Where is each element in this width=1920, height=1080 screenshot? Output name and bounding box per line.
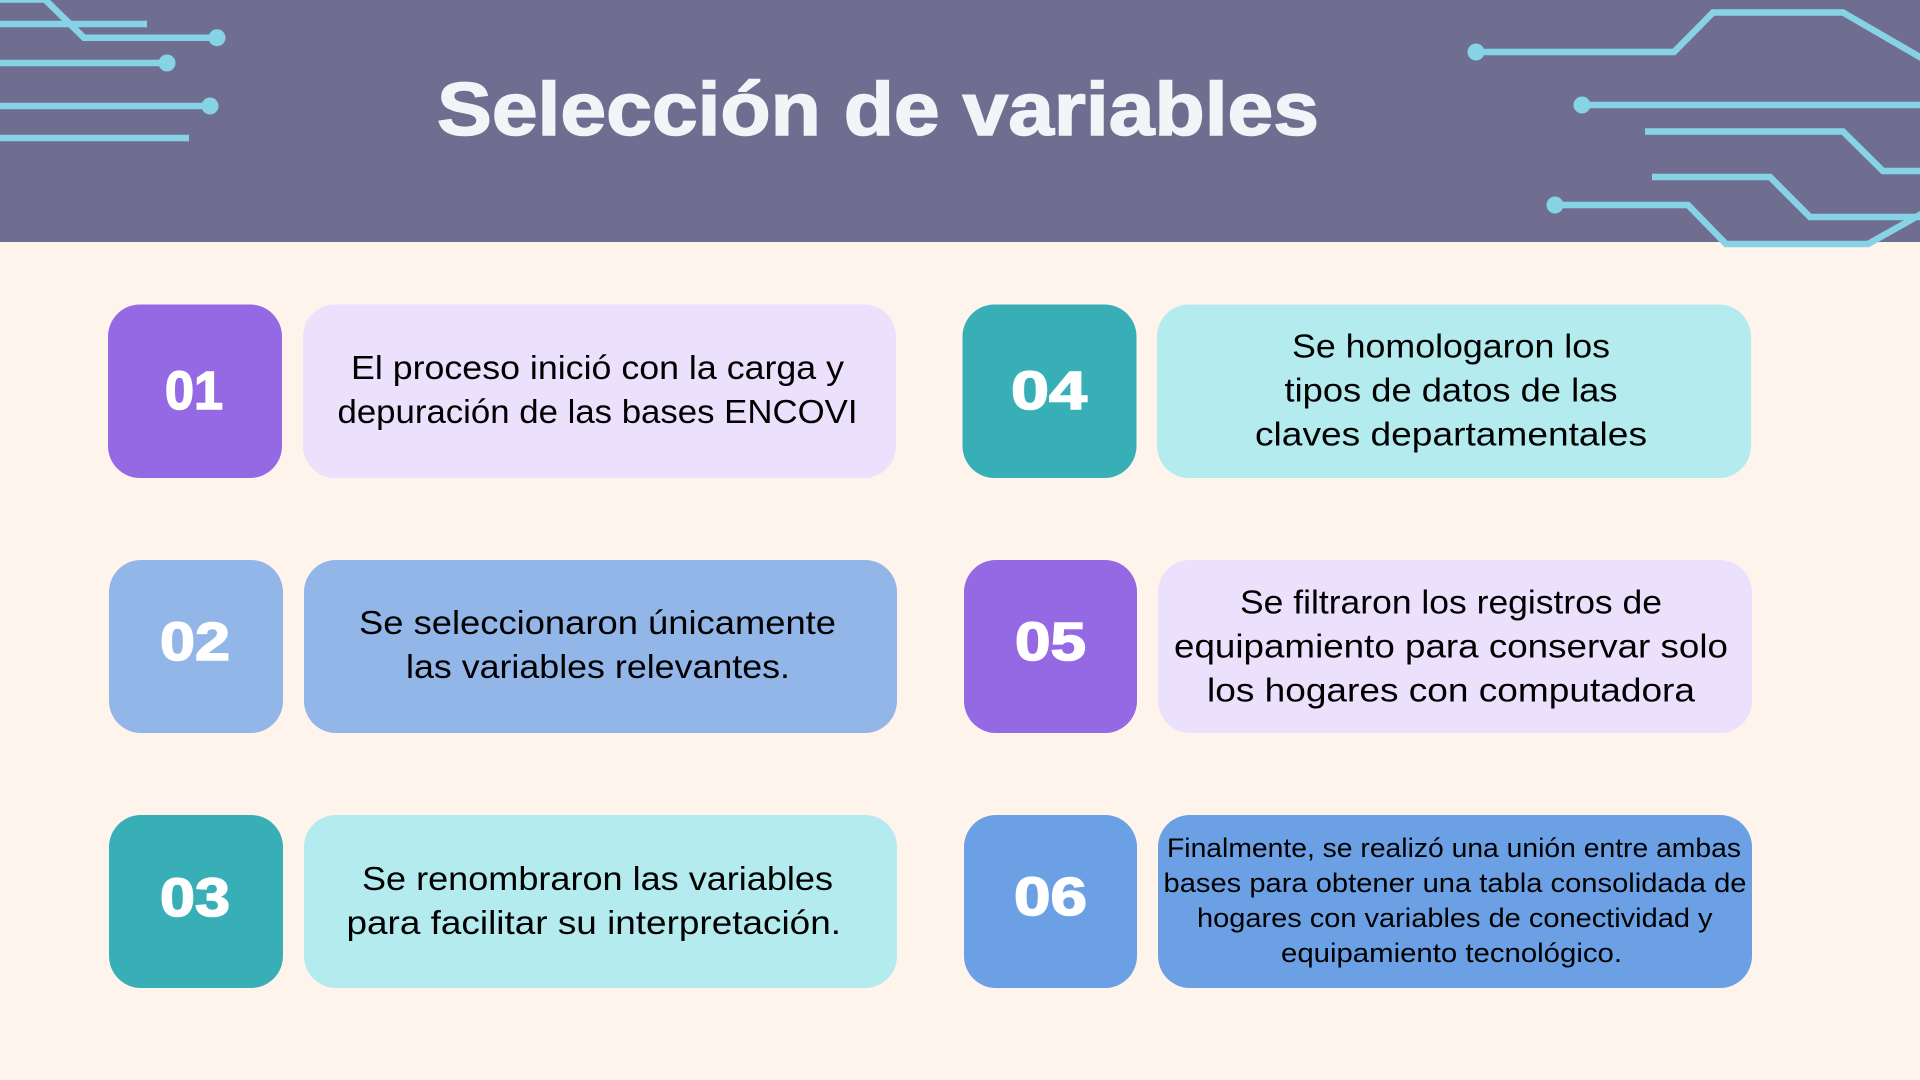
text card 06: hogares con variables de conectividad y [1197, 903, 1713, 933]
text card 05 [1158, 560, 1752, 733]
step 01 [108, 304, 896, 478]
number badge 06: 06 [1014, 867, 1087, 927]
step 05 [964, 560, 1752, 733]
number badge 01: 01 [165, 361, 223, 421]
header banner [0, 0, 1920, 242]
text card 05: equipamiento para conservar solo [1174, 628, 1728, 664]
text card 03 [304, 815, 897, 988]
text card 04 [1157, 304, 1751, 478]
text card 03: Se renombraron las variables [362, 860, 833, 897]
number badge 03: 03 [160, 868, 230, 928]
text card 06: Finalmente, se realizó una unión entre ambas [1167, 833, 1741, 863]
number badge 04: 04 [1011, 361, 1087, 421]
text card 02: Se seleccionaron únicamente [359, 604, 836, 641]
number badge 05 [964, 560, 1137, 733]
number badge 05: 05 [1015, 612, 1086, 672]
number badge 02 [109, 560, 283, 733]
circuit decoration: left [0, 0, 226, 138]
circuit decoration: right [1468, 12, 1920, 244]
text card 05: Se filtraron los registros de [1240, 584, 1662, 620]
step 03 [109, 815, 897, 988]
text card 04: tipos de datos de las [1284, 372, 1618, 408]
title: Selección de variables [437, 67, 1319, 151]
text card 02 [304, 560, 897, 733]
number badge 01 [108, 304, 282, 478]
number badge 06 [964, 815, 1137, 988]
step 06 [964, 815, 1752, 988]
text card 04: claves departamentales [1255, 416, 1647, 452]
number badge 03 [109, 815, 283, 988]
text card 02: las variables relevantes. [406, 648, 790, 685]
text card 01 [303, 304, 896, 478]
step 02 [109, 560, 897, 733]
text card 03: para facilitar su interpretación. [346, 904, 841, 941]
text card 04: Se homologaron los [1292, 328, 1610, 364]
text card 01: depuración de las bases ENCOVI [338, 393, 858, 430]
text card 06: bases para obtener una tabla consolidada de [1164, 868, 1746, 898]
text card 05: los hogares con computadora [1207, 672, 1696, 708]
number badge 02: 02 [160, 612, 230, 672]
number badge 04 [962, 304, 1136, 478]
text card 06 [1158, 815, 1752, 988]
text card 01: El proceso inició con la carga y [351, 349, 845, 386]
step 04 [962, 304, 1751, 478]
text card 06: equipamiento tecnológico. [1281, 938, 1622, 968]
